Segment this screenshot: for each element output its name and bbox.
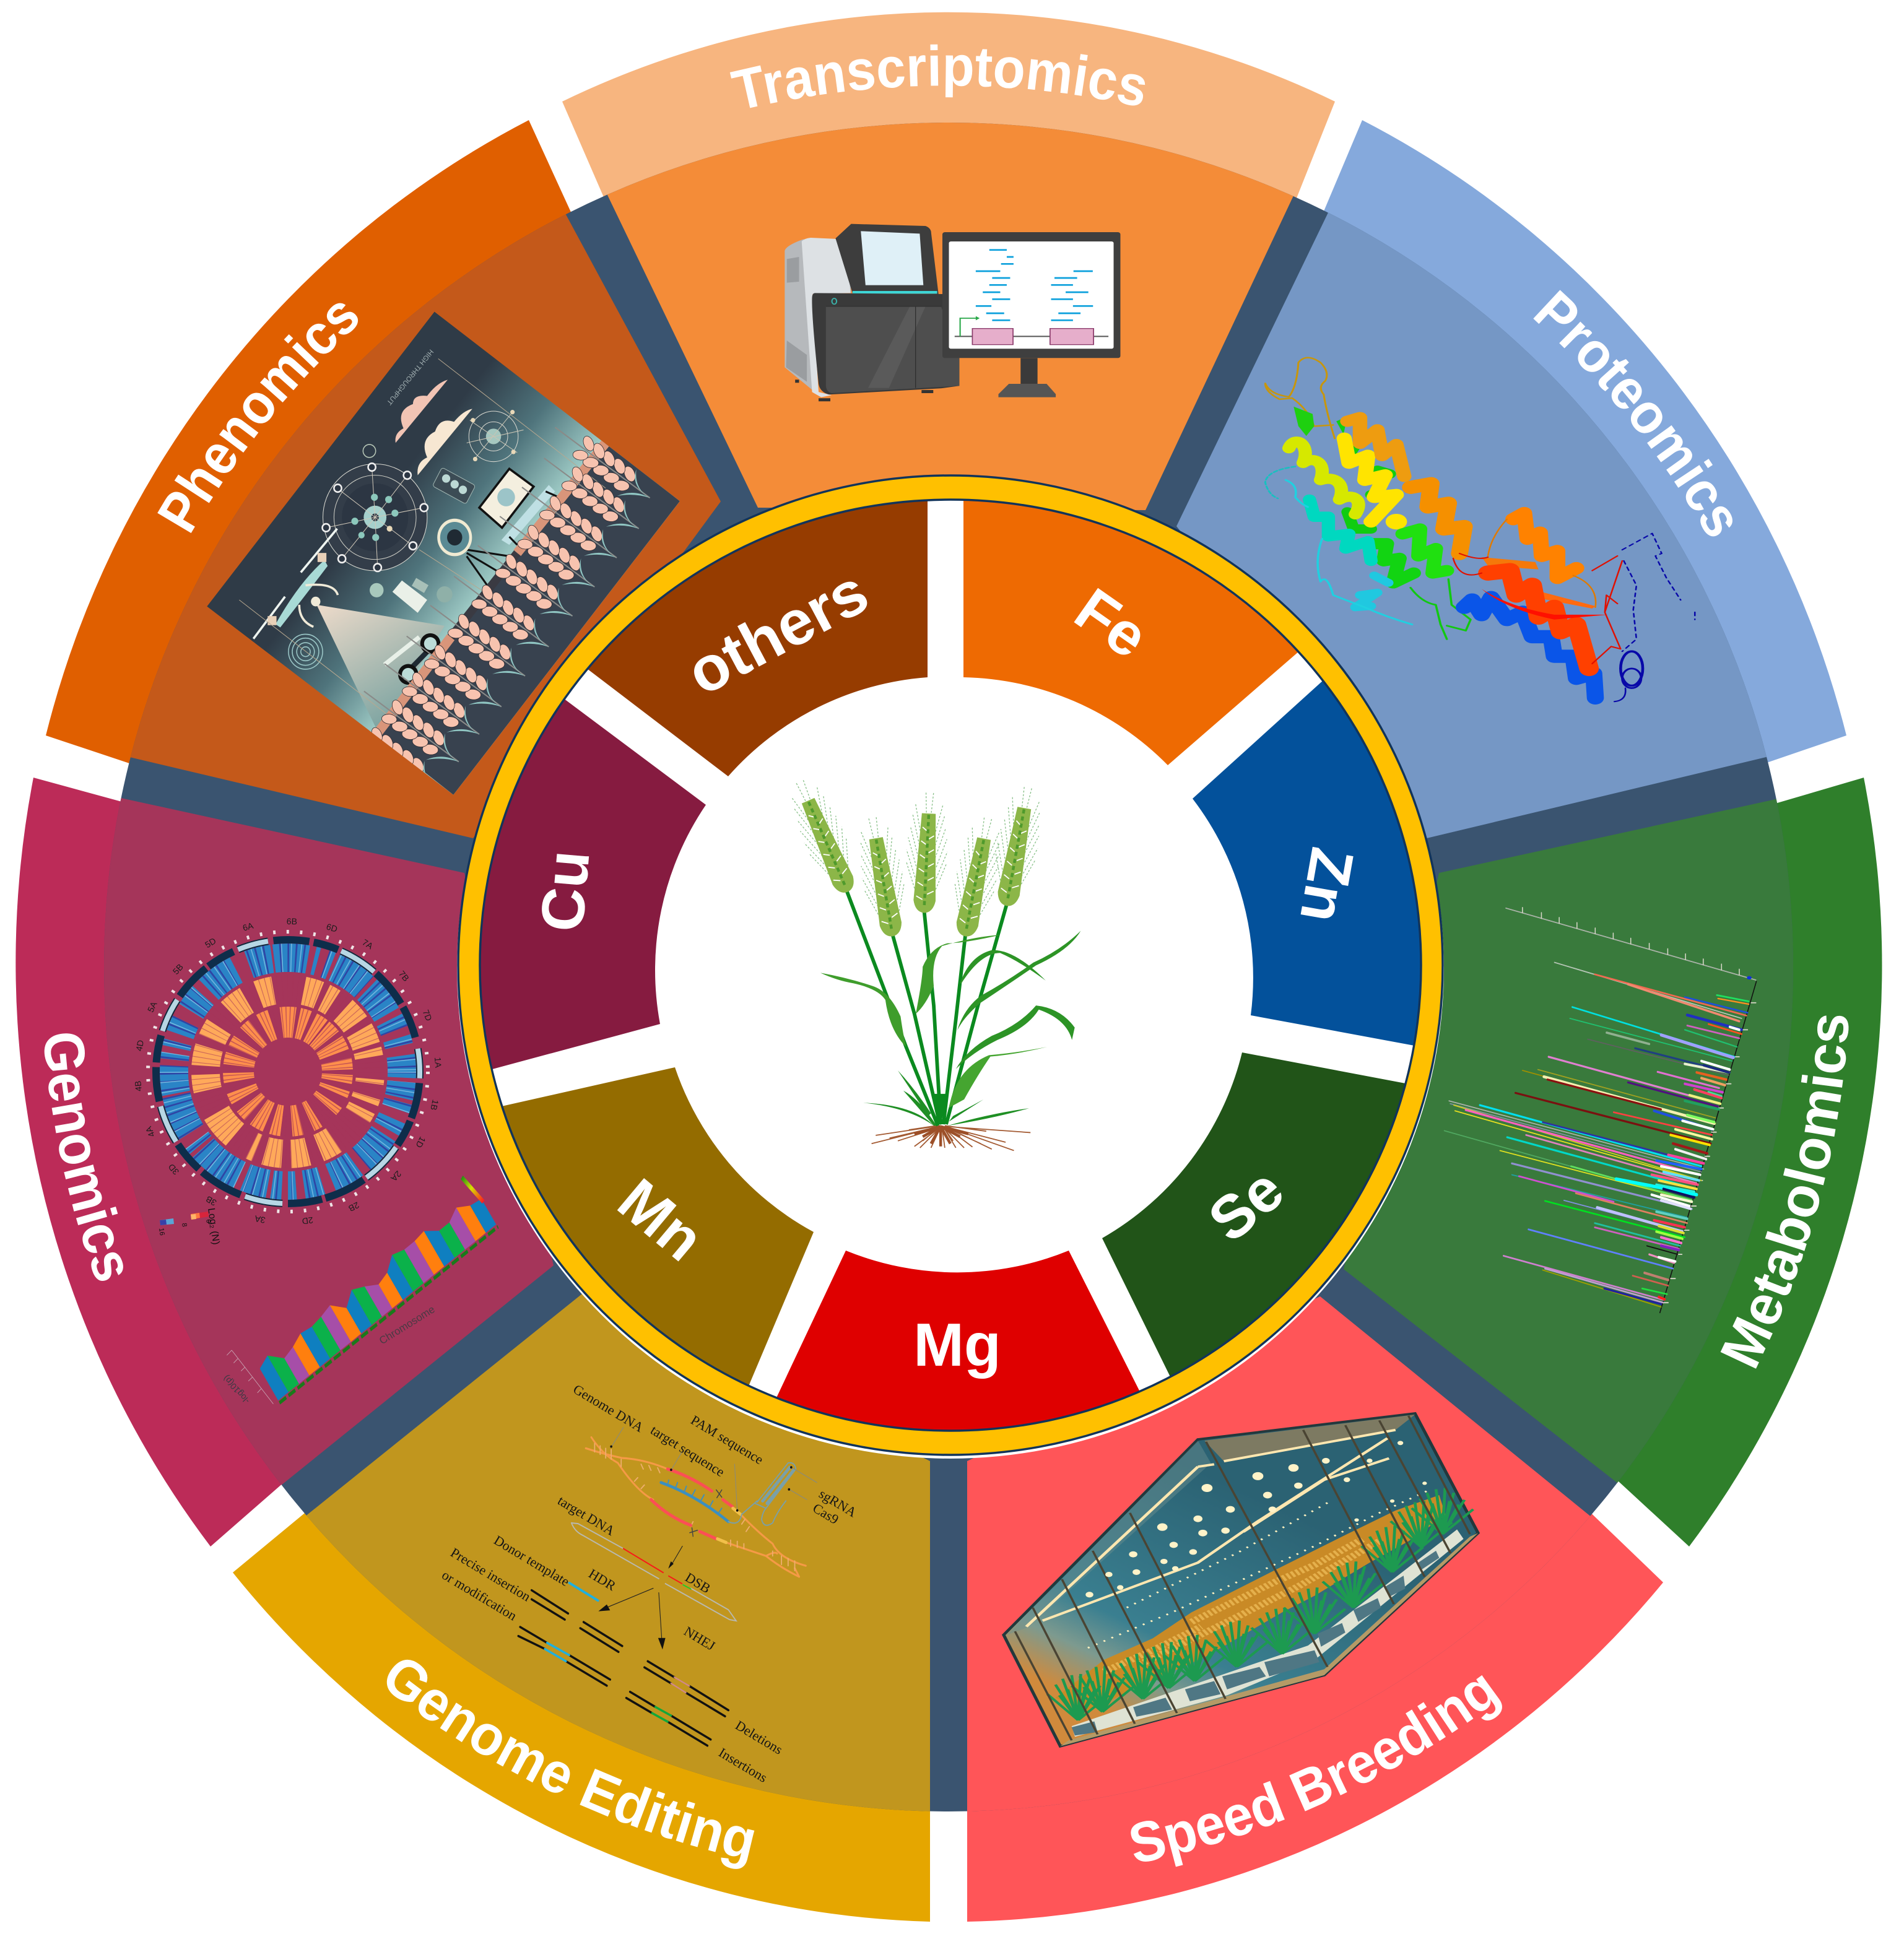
labels: genome editing text: or modification	[439, 1567, 519, 1623]
chromosome labels: 1B	[428, 1099, 441, 1111]
wheat ears	[781, 772, 1048, 940]
decorative ring halo	[457, 477, 1444, 1459]
heading: Metabolomics: Metabolomics	[1720, 1015, 1849, 1369]
diagram: CRISPR genome editing	[518, 1428, 817, 1746]
laptop	[479, 469, 557, 545]
chromosome labels: 6B	[287, 916, 297, 926]
chromosome labels	[133, 916, 443, 1226]
labels: genome editing text: Cas9	[810, 1500, 841, 1527]
band: Metabolomics	[1610, 778, 1882, 1546]
sector: Fe	[963, 497, 1299, 765]
chromosome labels: 2A	[389, 1169, 404, 1184]
labels: genome editing text: Genome DNA	[570, 1381, 646, 1435]
panel: Metabolomics	[1344, 799, 1793, 1483]
chromosome labels: 6A	[241, 921, 254, 933]
spectra axes	[1506, 908, 1756, 980]
ceiling panel	[1204, 1415, 1415, 1461]
sector: Zn	[1193, 680, 1424, 1046]
chromosome labels: 5B	[171, 962, 185, 976]
chromosome labels: 7B	[397, 969, 411, 983]
sector: Fe: Fe	[1063, 575, 1160, 671]
image: high-throughput phenotyping scene	[207, 312, 680, 795]
sector: Mn: Mn	[606, 1165, 716, 1274]
camera lens and tripod	[437, 519, 510, 585]
labels: genome editing text: target sequence	[648, 1422, 728, 1480]
planter boxes	[1072, 1551, 1439, 1735]
heading: Proteomics: Proteomics	[1533, 290, 1732, 536]
sector: Cu: Cu	[528, 848, 602, 934]
repair templates	[569, 1583, 598, 1600]
chromosome labels: 7D	[421, 1009, 434, 1022]
sector: Zn: Zn	[1287, 843, 1367, 927]
sector: Mg: Mg	[913, 1311, 1001, 1379]
chromosome labels: 3A	[253, 1213, 266, 1225]
orange inner ring thin stripes	[238, 1022, 337, 1121]
chromosome labels: 3D	[166, 1162, 181, 1177]
chromosome ideogram	[135, 919, 441, 1225]
legend: circos colour scale: 0	[204, 1219, 212, 1223]
hanging bulbs	[1085, 1441, 1427, 1597]
band: Transcriptomics	[562, 12, 1335, 204]
panel: Speed Breeding	[967, 1296, 1590, 1811]
wheat ears row	[344, 427, 650, 789]
icon: sequencer and monitor	[785, 224, 1120, 401]
legend: circos colour scale	[157, 1207, 221, 1246]
labels: genome editing text	[439, 1381, 859, 1785]
panel: Genomics	[104, 798, 554, 1485]
panel: Proteomics	[1176, 186, 1797, 838]
scissors	[690, 1490, 722, 1537]
heading: Transcriptomics: Transcriptomics	[729, 45, 1145, 108]
orange outer ring thin stripes	[206, 989, 370, 1154]
heading: Phenomics: Phenomics	[157, 303, 358, 533]
chromosome labels: 3B	[204, 1194, 218, 1208]
icon: wheat plant	[781, 772, 1081, 1150]
blue density ring	[174, 958, 402, 1186]
sector: Mn	[502, 1067, 814, 1390]
horizon glow dots	[1088, 1489, 1431, 1648]
drone light beam	[316, 605, 445, 732]
chromosome labels: 4D	[134, 1039, 146, 1052]
wheat ridge	[376, 443, 606, 734]
field rover	[385, 633, 440, 685]
orange outer ring	[199, 983, 377, 1161]
legend: circos colour scale: 8	[180, 1223, 188, 1227]
network circle large	[323, 463, 428, 571]
ring: yellow border	[458, 475, 1443, 1455]
panel: Transcriptomics	[607, 123, 1293, 510]
image: protein ribbon structure	[1265, 358, 1695, 701]
sector: Cu	[475, 698, 706, 1071]
leaves	[820, 973, 906, 1047]
ring: navy inner line	[480, 500, 1421, 1431]
labels: genome editing text: Precise insertion	[448, 1545, 533, 1604]
labels: genome editing text: PAM sequence	[688, 1412, 766, 1467]
arrows	[602, 1546, 682, 1644]
network circle small	[467, 410, 524, 462]
sector: Mg	[775, 1251, 1142, 1436]
labels: genome editing text: Deletions	[732, 1717, 786, 1758]
slate spokes disc	[104, 123, 1793, 1811]
ring: navy outer line	[458, 475, 1443, 1455]
chromosome labels: 4A	[143, 1125, 157, 1139]
sector: Se: Se	[1196, 1155, 1296, 1255]
camera cylinder	[393, 578, 428, 613]
chromosome labels: 4B	[133, 1080, 144, 1092]
legend: circos colour scale: Log₂ (N)	[206, 1207, 221, 1246]
labels: genome editing text: DSB	[682, 1569, 713, 1596]
golden wheat band	[1056, 1495, 1446, 1712]
heading: Genomics: Genomics	[45, 1033, 123, 1281]
orange inner ring	[229, 1013, 347, 1130]
green wheat tufts	[1048, 1488, 1473, 1720]
panel: Phenomics	[98, 188, 721, 838]
chromosome labels: 2B	[347, 1200, 361, 1213]
roots	[872, 1126, 1030, 1150]
light strips	[1027, 1430, 1396, 1626]
target DNA grey	[572, 1523, 736, 1621]
chromosome labels: 6D	[325, 921, 339, 934]
chromosome labels: 2D	[302, 1215, 314, 1226]
sensor box	[432, 467, 476, 504]
label: Chromosome axis: Chromosome	[377, 1303, 437, 1347]
stems	[846, 891, 1007, 1126]
rear roof glass	[1007, 1441, 1211, 1635]
planter tops	[1072, 1529, 1464, 1737]
clouds	[396, 380, 472, 475]
panel: Genome Editing	[306, 1294, 930, 1811]
labels: genome editing text: target DNA	[555, 1493, 618, 1538]
chart: metabolomics spectra	[1445, 908, 1757, 1312]
image: speed breeding greenhouse	[1004, 1413, 1478, 1746]
sector: Se	[1102, 1052, 1406, 1381]
faint picture title: HIGH THROUGHPUT	[385, 348, 435, 406]
chromosome labels: 5D	[203, 935, 218, 950]
chromosome labels: 1D	[414, 1135, 428, 1150]
band: Genomics	[15, 778, 294, 1546]
radar rings	[289, 634, 323, 669]
chromosome labels: 7A	[360, 937, 375, 952]
sector: others	[587, 497, 928, 776]
band: Proteomics	[1319, 120, 1846, 768]
frame posts	[1015, 1416, 1470, 1740]
labels: genome editing text: HDR	[586, 1566, 619, 1594]
chromosome labels: 5A	[146, 1000, 159, 1014]
chromosome labels: 1A	[433, 1057, 443, 1069]
labels: genome editing text: sgRNA	[816, 1486, 859, 1520]
guide RNA	[661, 1483, 728, 1522]
chart: circos genome plot	[133, 916, 443, 1226]
heading: Genome Editing: Genome Editing	[386, 1659, 754, 1869]
chart: Manhattan plot	[227, 1178, 498, 1404]
labels: genome editing text: Insertions	[716, 1745, 770, 1785]
drone	[253, 529, 338, 639]
heading: Speed Breeding: Speed Breeding	[1131, 1675, 1502, 1867]
orange DNA strands	[586, 1438, 806, 1577]
floor	[1060, 1533, 1478, 1746]
labels: genome editing text: NHEJ	[681, 1623, 718, 1654]
grid lines	[239, 358, 606, 715]
target red strands	[651, 1469, 733, 1539]
sector: others: others	[676, 556, 879, 709]
label: -log10(p) axis: -log10(p)	[221, 1373, 251, 1406]
pointer lines	[611, 1428, 817, 1511]
wheat field dark ground	[376, 443, 680, 795]
band: Genome Editing	[233, 1501, 930, 1922]
labels: genome editing text: Donor template	[491, 1532, 572, 1589]
band: Phenomics	[46, 120, 576, 768]
dense multicolour ends near axis	[1651, 1027, 1739, 1299]
band: Speed Breeding	[967, 1504, 1663, 1922]
legend: circos colour scale: 16	[157, 1228, 166, 1236]
